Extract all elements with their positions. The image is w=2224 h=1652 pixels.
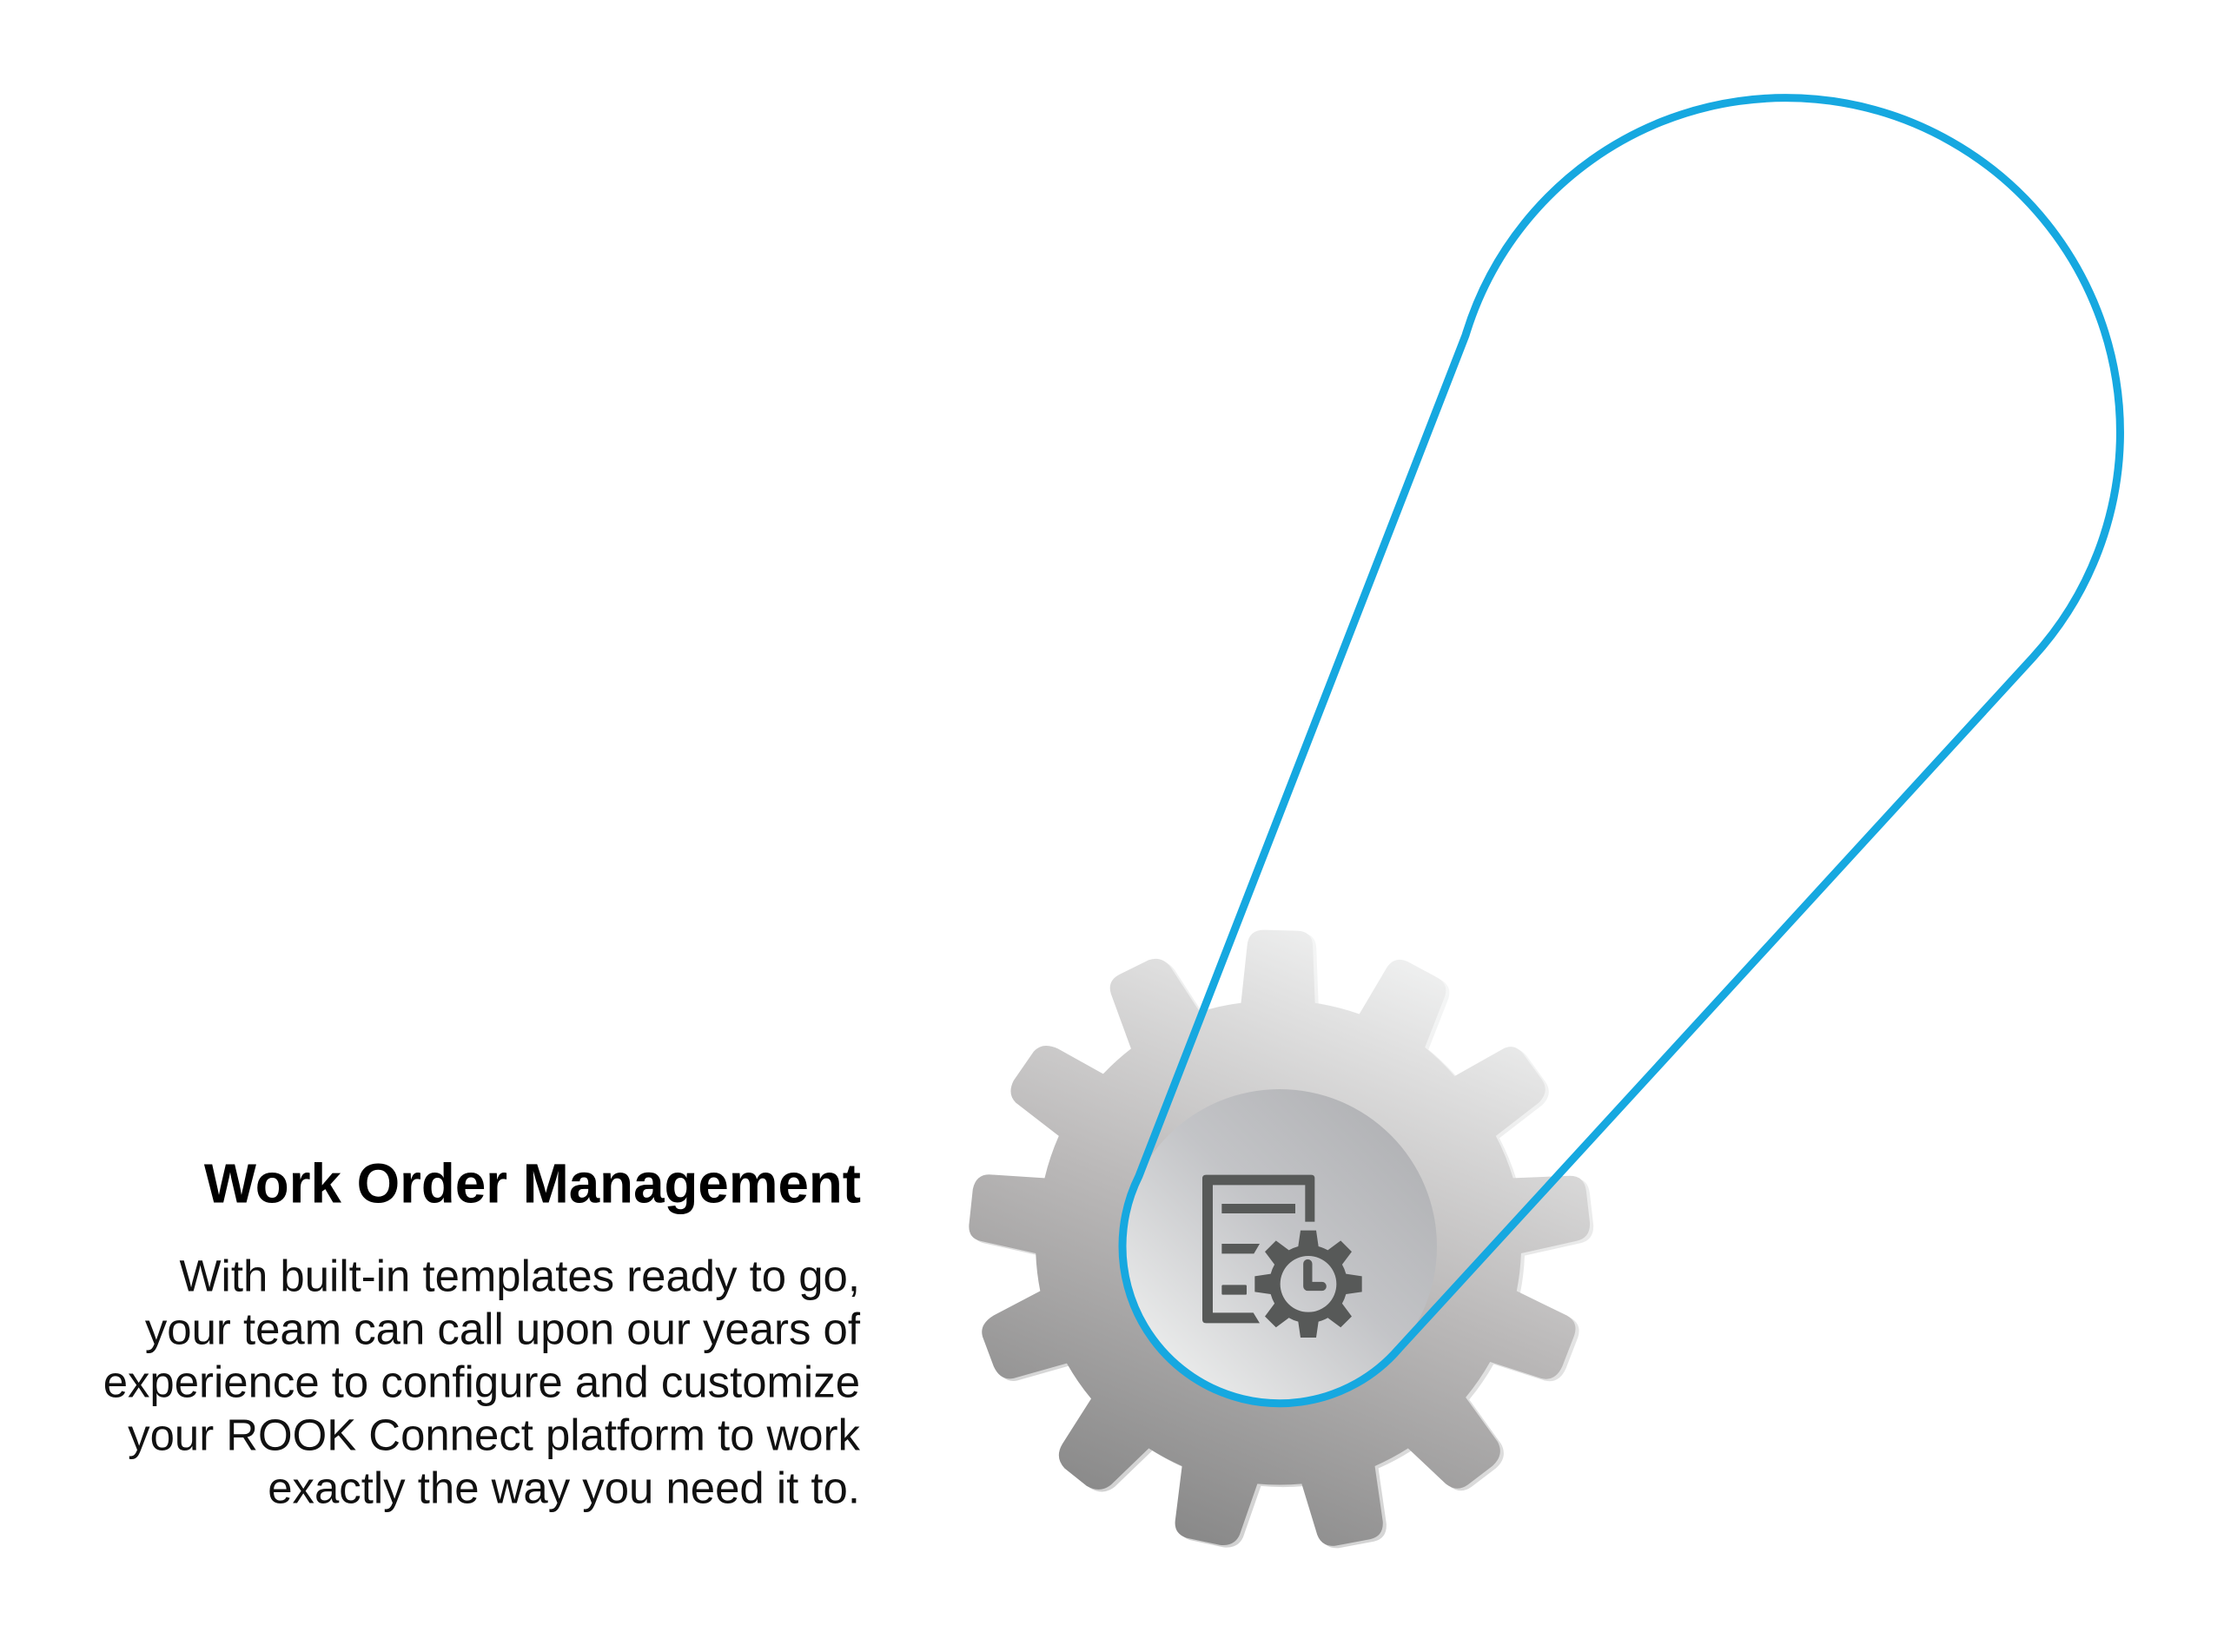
icon: document text line 3 (1221, 1285, 1247, 1295)
gear hub circle (1122, 1089, 1437, 1404)
body text: your team can call upon our years of (145, 1305, 861, 1353)
blue teardrop outline (1122, 98, 2120, 1404)
body text: experience to configure and customize (103, 1357, 860, 1407)
body text (103, 1251, 861, 1513)
body text: exactly the way you need it to. (268, 1463, 860, 1513)
large gear (969, 930, 1593, 1548)
icon: clock hands (1307, 1264, 1322, 1286)
icon: small gear (1254, 1231, 1362, 1338)
icon: document outline (1202, 1175, 1314, 1323)
body text: your ROOK Connect platform to work (128, 1411, 861, 1459)
icon: work order document with clock gear (1202, 1175, 1362, 1338)
body text: With built-in templates ready to go, (179, 1251, 860, 1301)
heading: Work Order Management (204, 1153, 861, 1214)
icon: document text line 1 (1221, 1204, 1295, 1213)
icon: document text line 2 (1221, 1244, 1260, 1253)
